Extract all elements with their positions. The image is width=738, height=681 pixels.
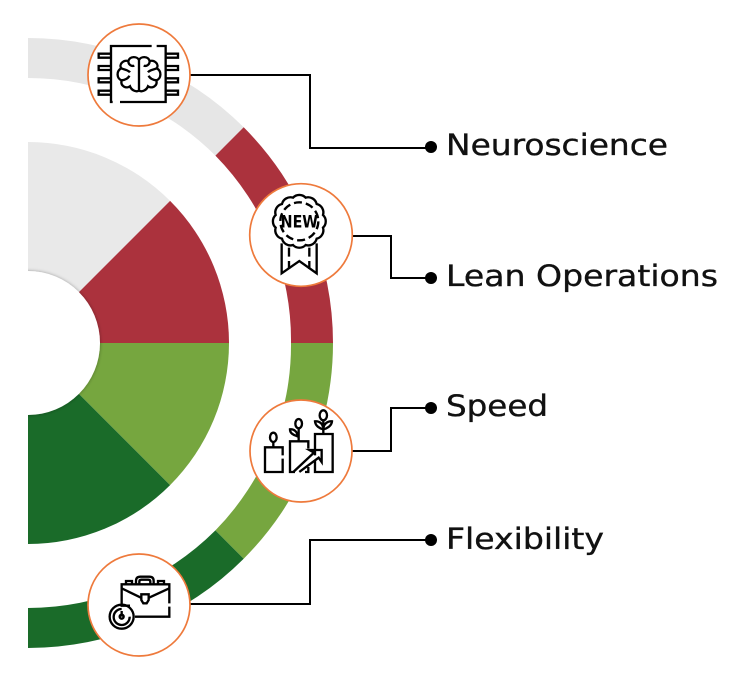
label: flexibility: Flexibility [446, 522, 604, 556]
donut segment: dark green [28, 394, 170, 544]
connector: speed [352, 408, 431, 451]
connector end dots [425, 141, 437, 546]
ring segment: dark green [28, 530, 244, 648]
connector: flexibility [190, 540, 431, 604]
icon: new badge [250, 184, 352, 286]
icon: brain chip [88, 24, 190, 126]
badge text: NEW [281, 212, 318, 231]
donut segment: light green [79, 343, 229, 485]
ring segment: light green [215, 343, 333, 559]
connector: neuroscience [190, 75, 431, 148]
label: neuroscience: Neuroscience [446, 128, 668, 162]
ring segment: grey [28, 38, 244, 156]
donut segment: red [79, 201, 229, 343]
icon: briefcase with radar [88, 554, 190, 656]
ring segment: red [215, 127, 333, 343]
outer ring [28, 38, 333, 648]
icon: growth bars [250, 400, 352, 502]
connector: lean operations [352, 236, 431, 278]
donut segment: grey [28, 142, 170, 292]
label: lean operations: Lean Operations [446, 259, 718, 293]
donut hole with soft shadow [28, 269, 102, 416]
inner donut [28, 142, 229, 544]
connector lines [190, 75, 431, 604]
label: speed: Speed [446, 389, 548, 423]
